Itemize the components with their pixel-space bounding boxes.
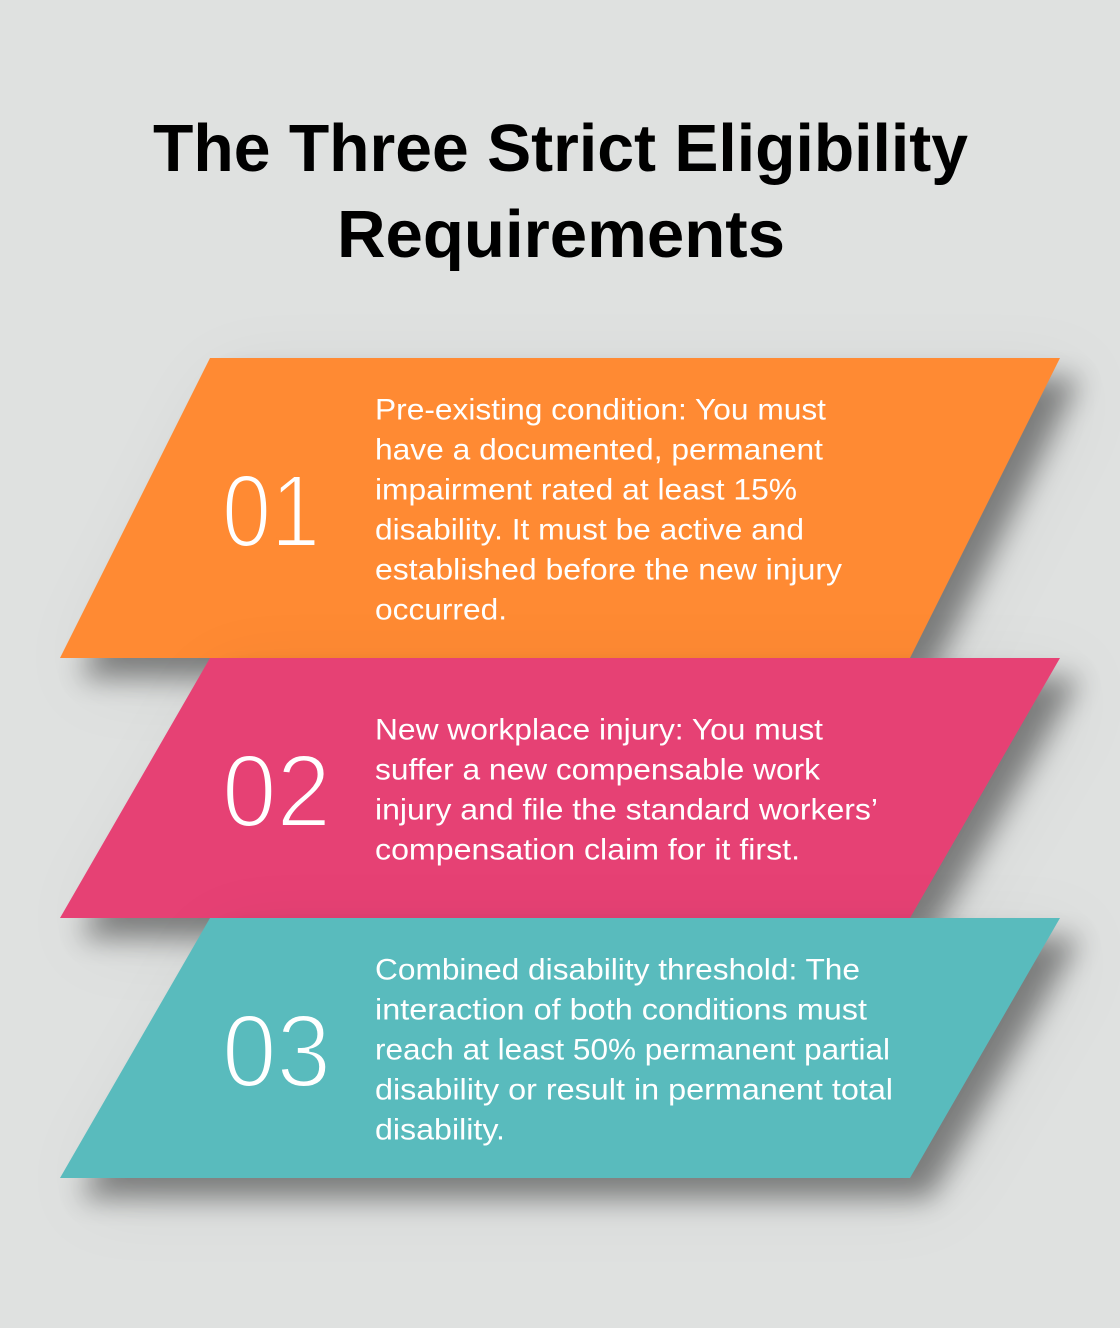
number 03: 03 [222, 994, 331, 1108]
text: combined disability threshold: interaction of both conditions must [375, 994, 868, 1026]
text: new workplace injury [375, 714, 878, 866]
text: new workplace injury: injury and file the standard workers’ [375, 794, 878, 826]
text: pre-existing condition: Pre-existing condition: You must [375, 394, 827, 426]
text: pre-existing condition: impairment rated at least 15% [375, 474, 797, 506]
text: pre-existing condition: disability. It must be active and [375, 514, 804, 546]
teal parallelogram [60, 918, 1060, 1178]
text: pre-existing condition: have a documented, permanent [375, 434, 824, 466]
number 02: 02 [222, 734, 331, 848]
text: new workplace injury: suffer a new compensable work [375, 754, 821, 786]
title [153, 111, 968, 272]
panel: requirement 02 new workplace injury [60, 658, 1060, 918]
text: combined disability threshold: reach at least 50% permanent partial [375, 1034, 890, 1066]
text: pre-existing condition: established before the new injury [375, 554, 842, 586]
text: combined disability threshold [375, 954, 893, 1146]
text: new workplace injury: compensation claim for it first. [375, 834, 800, 866]
pink parallelogram [60, 658, 1060, 918]
text: combined disability threshold: disability or result in permanent total [375, 1074, 893, 1106]
panel: requirement 03 combined disability threshold [60, 918, 1060, 1178]
title: The Three Strict Eligibility [153, 111, 968, 186]
text: pre-existing condition [375, 394, 842, 626]
text: combined disability threshold: Combined disability threshold: The [375, 954, 860, 986]
text: new workplace injury: New workplace injury: You must [375, 714, 824, 746]
panel: requirement 01 pre-existing condition [60, 358, 1060, 658]
number 01: 01 [222, 454, 320, 568]
text: combined disability threshold: disability. [375, 1114, 505, 1146]
text: pre-existing condition: occurred. [375, 594, 507, 626]
orange parallelogram [60, 358, 1060, 658]
title: Requirements [337, 197, 785, 272]
